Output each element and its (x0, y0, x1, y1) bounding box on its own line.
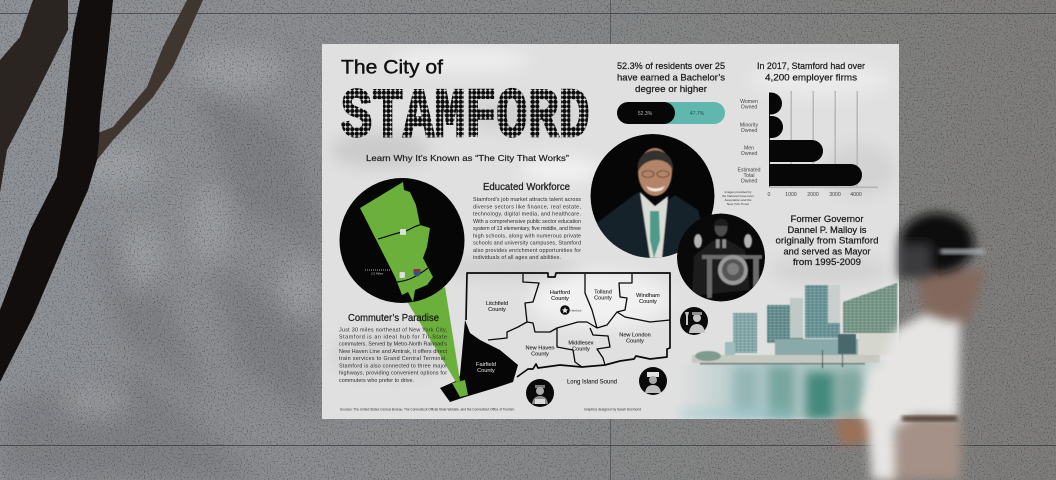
person: dark hair (898, 213, 974, 278)
title: The City of (341, 58, 444, 78)
map: county labels: County (626, 338, 644, 344)
person: white shirt (860, 314, 960, 480)
map: county labels: County (639, 299, 657, 305)
chart: education progress bar: 52.3% (638, 111, 653, 117)
map: county labels: County (551, 296, 569, 302)
text: commuter's paradise paragraph: Stamford is also connected to three major (339, 364, 447, 370)
map: Stamford city shape (360, 182, 433, 302)
text: educated workforce paragraph: technology, digital media, and healthcare. (473, 212, 581, 218)
title (341, 59, 588, 138)
map: county labels (476, 290, 660, 386)
poster paper (322, 44, 899, 419)
photo: Malloy at podium (677, 214, 765, 302)
map: scale bar: 2.5 Miles (371, 272, 383, 276)
text: commuter's paradise paragraph: New Haven Line and Amtrak, it offers direct (339, 349, 448, 355)
heading: bachelor's degree statistic (617, 61, 725, 95)
heading: bachelor's degree statistic: 52.3% of residents over 25 (617, 61, 725, 72)
map circle of Stamford (340, 178, 464, 303)
bar chart: employer firms by owner (737, 91, 878, 198)
person: shirt hem shadow (902, 416, 957, 421)
text: commuter's paradise paragraph: Just 30 miles northeast of New York City, (339, 328, 448, 334)
text: educated workforce paragraph: also provides enrichment opportunities for (473, 248, 581, 254)
bar chart: employer firms by owner: Owned (741, 178, 757, 184)
icon: nurse (639, 367, 667, 395)
image credit (722, 191, 754, 205)
chart: education progress bar (617, 102, 725, 124)
text: educated workforce paragraph: schools and university campuses, Stamford (473, 240, 581, 246)
bar chart: employer firms by owner: Owned (741, 128, 757, 134)
heading: bachelor's degree statistic: degree or higher (635, 84, 708, 95)
map: county labels: County (488, 307, 506, 313)
map: county labels: Windham (636, 293, 660, 299)
map: county labels: Hartford (550, 290, 570, 296)
photo: portrait of Dannel Malloy (588, 134, 714, 262)
image credit: Images provided by (724, 190, 752, 194)
heading: employer firms: In 2017, Stamford had over (757, 61, 866, 72)
heading: bachelor's degree statistic: have earned a Bachelor’s (617, 72, 725, 84)
footer: sources: Sources: The United States Census Bureau, The Connecticut Official State Website, and the Connecticut Office of Tourism. (340, 408, 515, 412)
water (680, 362, 899, 419)
map: Fairfield county (440, 320, 518, 402)
bar chart: employer firms by owner: 3000 (829, 192, 841, 198)
bar chart: employer firms by owner: Owned (741, 104, 757, 110)
map: county labels: Long Island Sound (567, 380, 617, 386)
text: commuter's paradise paragraph: train services to Grand Central Terminal. (339, 356, 447, 362)
map: county labels: New Haven (526, 346, 554, 352)
text: former governor: Dannel P. Malloy is (788, 225, 867, 236)
map: county labels: Litchfield (486, 301, 508, 307)
connecticut county map (440, 273, 670, 402)
map: county labels: County (477, 368, 495, 374)
bar chart: employer firms by owner: 1000 (785, 192, 797, 198)
text: former governor: originally from Stamford (776, 236, 878, 246)
map: county labels: County (572, 346, 590, 352)
text: commuter's paradise paragraph (339, 328, 448, 384)
bar chart: employer firms by owner: Minority (740, 122, 758, 128)
title: STAMFORD dotted lettering: STAMFORD (341, 79, 590, 158)
heading: employer firms: 4,200 employer firms (765, 72, 857, 84)
icon: mechanic (680, 307, 708, 335)
map: county labels: Tolland (594, 290, 612, 296)
map: county labels: New London (619, 332, 651, 338)
bar chart: employer firms by owner: Owned (741, 151, 757, 157)
map: county labels: Middlesex (568, 340, 594, 346)
person: sunglasses band (940, 249, 985, 254)
chart: education progress bar: 47.7% (690, 111, 705, 117)
skyline buildings (692, 283, 897, 368)
text: former governor: and served as Mayor (784, 246, 871, 258)
heading: educated workforce: Educated Workforce (483, 182, 570, 193)
bar chart: employer firms by owner: Total (744, 173, 754, 179)
text: commuter's paradise paragraph: Stamford is an ideal hub for Tri-State (339, 334, 447, 340)
person: arm and skin (835, 265, 985, 480)
text: educated workforce paragraph: system of 13 elementary, five middle, and three (473, 226, 581, 232)
subtitle: Learn Why It’s Known as “The City That Works” (366, 153, 569, 163)
text: commuter's paradise paragraph: highways, providing convenient options for (339, 370, 447, 376)
map: state outline and county borders (466, 273, 670, 377)
footer: credit: Graphics designed by Sarah Desmond (584, 408, 641, 412)
bar chart: employer firms by owner: 0 (768, 192, 771, 198)
text: former governor (776, 214, 878, 268)
text: educated workforce paragraph: diverse sectors like finance, real estate, (473, 204, 582, 210)
photo: Stamford waterfront skyline (680, 283, 899, 419)
text: former governor: from 1995-2009 (793, 257, 861, 268)
image credit: Association and the (724, 198, 752, 202)
bar chart: employer firms by owner: Men (744, 146, 754, 152)
infographic poster (322, 44, 899, 419)
text: educated workforce paragraph (473, 197, 582, 261)
green pointer beam to Stamford (408, 287, 460, 382)
map: county labels: Fairfield (476, 362, 496, 368)
image credit: the National Governors (722, 194, 754, 198)
icon: teacher with laptop (526, 379, 554, 407)
bar chart: employer firms by owner: 2000 (807, 192, 819, 198)
icon: Hartford capital star: Hartford (570, 308, 582, 312)
text: educated workforce paragraph: Stamford’s job market attracts talent across (473, 197, 581, 203)
icon: route shields (400, 229, 420, 278)
image credit: New York Times (727, 202, 750, 206)
map: county labels: County (531, 352, 549, 358)
blurred passer-by (835, 213, 985, 480)
map: county labels: County (594, 296, 612, 302)
text: commuter's paradise paragraph: commuters who prefer to drive. (339, 378, 414, 384)
map: highways (378, 225, 428, 282)
text: commuter's paradise paragraph: commuters. Served by Metro-North Railroad’s (339, 342, 447, 348)
text: educated workforce paragraph: individuals of all ages and abilities. (473, 255, 561, 261)
tree trunks and branch (0, 0, 203, 382)
bar chart: employer firms by owner: 4000 (850, 192, 862, 198)
icon: Hartford capital star (560, 305, 582, 315)
text: educated workforce paragraph: With a comprehensive public sector education (473, 219, 581, 225)
heading: employer firms (757, 61, 866, 84)
text: former governor: Former Governor (790, 214, 864, 225)
heading: commuter's paradise: Commuter’s Paradise (348, 313, 439, 324)
bar chart: employer firms by owner: Women (740, 99, 758, 105)
bar chart: employer firms by owner: Estimated (737, 168, 761, 174)
text: educated workforce paragraph: high schools, along with numerous private (473, 233, 581, 239)
map: Stamford highlight (452, 380, 468, 397)
